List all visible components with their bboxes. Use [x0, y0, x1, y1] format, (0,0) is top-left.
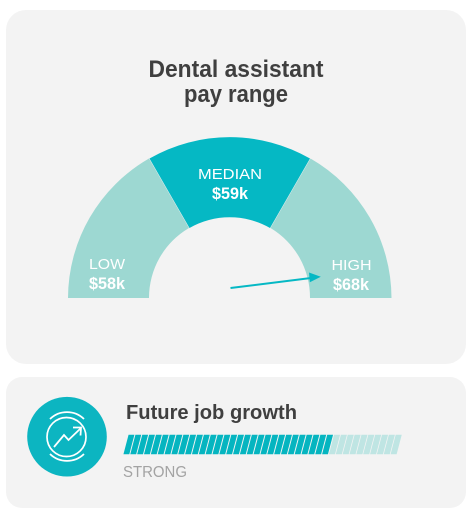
title: pay range: [184, 81, 288, 108]
gauge segment: high: HIGH: [332, 257, 372, 274]
filled stripes: [126, 435, 332, 454]
gauge segment: low: LOW: [89, 256, 126, 273]
title: [148, 56, 324, 108]
panel: pay range: [6, 10, 466, 364]
title: Dental assistant: [148, 56, 324, 83]
heading: future job growth: Future job growth: [126, 402, 297, 424]
gauge segment: high: [270, 158, 392, 298]
panel: job growth: [6, 377, 466, 508]
gauge segment: median: [150, 137, 310, 228]
gauge segment: low: $58k: [89, 275, 126, 293]
icon: growth chart in circle: [27, 397, 107, 477]
empty stripes: [332, 435, 400, 454]
arrow: gauge needle: [230, 272, 321, 288]
gauge segment: high: $68k: [333, 276, 370, 294]
label: strong: STRONG: [123, 464, 187, 481]
gauge chart: [68, 137, 392, 298]
gauge segment: low: [68, 158, 189, 298]
progress bar: [126, 435, 400, 454]
gauge segment: median: $59k: [212, 185, 249, 203]
gauge segment: median: MEDIAN: [198, 166, 262, 183]
